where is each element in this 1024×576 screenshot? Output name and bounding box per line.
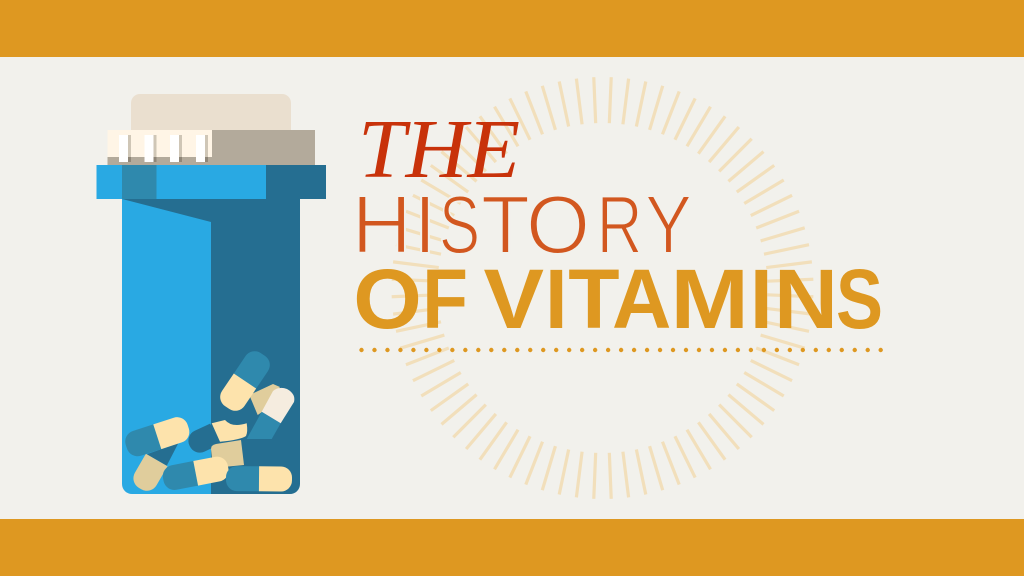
capsule: left — [122, 414, 192, 459]
title: HISTORY: H — [352, 178, 412, 271]
bottom band — [0, 519, 1024, 576]
tan pill fragment — [211, 440, 244, 468]
title: OF VITAMINS: V — [484, 252, 544, 346]
bottle body light side — [122, 199, 211, 494]
title: OF VITAMINS: A — [612, 252, 671, 346]
bottle body dark side — [211, 199, 300, 494]
title: OF VITAMINS: S — [836, 252, 883, 346]
cap ridges — [119, 135, 208, 162]
cap band highlight — [108, 130, 212, 157]
dotted divider — [362, 348, 882, 352]
tan wedge behind right capsule — [249, 384, 280, 415]
bottle cap top — [131, 94, 291, 130]
title: HISTORY: O — [526, 178, 590, 271]
title: HISTORY — [352, 178, 692, 271]
title: OF VITAMINS: F — [422, 252, 468, 346]
capsule: lower middle — [161, 455, 230, 492]
capsule: top — [216, 347, 274, 415]
title: THE: THE — [358, 103, 520, 196]
title: HISTORY: I — [414, 178, 436, 271]
top band — [0, 0, 1024, 57]
title: OF VITAMINS: M — [670, 252, 749, 346]
title: OF VITAMINS: T — [568, 252, 620, 346]
sunburst ring — [392, 77, 813, 499]
title: HISTORY: T — [481, 178, 530, 271]
pill bottle — [96, 94, 326, 495]
capsule: lower right — [226, 466, 292, 492]
title: OF VITAMINS: O — [353, 252, 422, 346]
title: OF VITAMINS: I — [545, 252, 568, 346]
title: OF VITAMINS: I — [750, 252, 773, 346]
tan pill under left capsule — [129, 443, 178, 495]
title: HISTORY: S — [439, 178, 480, 271]
title: HISTORY: Y — [645, 178, 692, 271]
title: OF VITAMINS: N — [774, 252, 838, 346]
rim shadow on body — [122, 199, 211, 222]
title: HISTORY: R — [597, 178, 643, 271]
pills — [122, 347, 294, 495]
cap band — [108, 130, 315, 165]
title: OF VITAMINS — [353, 252, 883, 346]
bottle rim — [96, 165, 326, 199]
capsule: off-white and blue — [247, 388, 294, 439]
capsule: middle with bite — [185, 420, 247, 456]
